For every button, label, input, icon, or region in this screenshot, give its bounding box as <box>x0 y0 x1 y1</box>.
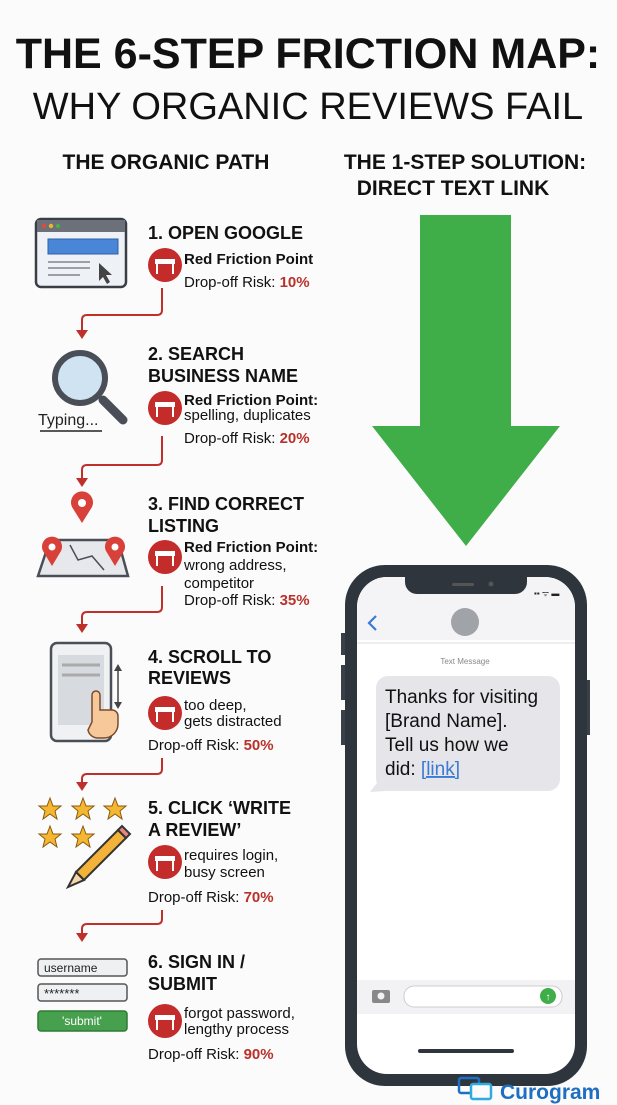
message bubble <box>370 676 560 792</box>
step 3: LISTING <box>148 516 219 536</box>
badge: friction <box>148 696 182 730</box>
icon: map pins <box>38 491 128 576</box>
icon: stars and pencil <box>39 798 130 887</box>
step 4: 4. SCROLL TO <box>148 647 271 667</box>
arrow: connector 4-5 <box>76 758 162 791</box>
step 4: Drop-off Risk: 50% <box>148 737 274 754</box>
badge: friction <box>148 540 182 574</box>
title <box>16 30 600 128</box>
step 1: 1. OPEN GOOGLE <box>148 223 303 243</box>
arrow: connector 3-4 <box>76 586 162 633</box>
step 5: A REVIEW’ <box>148 820 241 840</box>
icon: login form <box>38 959 127 1031</box>
message bubble: did: [link] <box>385 759 460 780</box>
icon: tablet scroll <box>51 643 122 741</box>
arrow: connector 2-3 <box>76 436 162 487</box>
icon: magnifier: Typing... <box>38 412 98 429</box>
arrow: connector 1-2 <box>76 288 162 339</box>
icon: login form: username <box>44 961 98 975</box>
step 3: 3. FIND CORRECT <box>148 494 304 514</box>
step 1: Red Friction Point <box>184 251 313 268</box>
step 2 <box>38 344 318 447</box>
badge: friction <box>148 248 182 282</box>
icon: magnifier <box>38 353 123 431</box>
badge: friction <box>148 391 182 425</box>
badge: friction <box>148 845 182 879</box>
icon: login form: ******* <box>44 986 79 1001</box>
step 4: gets distracted <box>184 713 282 730</box>
step 2: 2. SEARCH <box>148 344 244 364</box>
icon: login form: 'submit' <box>62 1014 102 1028</box>
step 5: busy screen <box>184 864 265 881</box>
step 5: requires login, <box>184 847 278 864</box>
message bubble: Tell us how we <box>385 735 509 756</box>
step 6: forgot password, <box>184 1005 295 1022</box>
badge: friction <box>148 1004 182 1038</box>
step 4 <box>51 643 282 754</box>
logo: Curogram: Curogram <box>500 1081 600 1104</box>
message bubble: [Brand Name]. <box>385 711 508 732</box>
title: THE 6-STEP FRICTION MAP: <box>16 30 600 78</box>
arrow: big green down <box>372 215 560 546</box>
step 3: Drop-off Risk: 35% <box>184 592 310 609</box>
arrow: connector 5-6 <box>76 910 162 942</box>
icon: browser <box>36 219 126 287</box>
step 4: too deep, <box>184 697 247 714</box>
phone: ↑ <box>546 992 550 1003</box>
step 2: spelling, duplicates <box>184 407 311 424</box>
step 2: Red Friction Point: <box>184 392 318 409</box>
step 1 <box>36 219 313 291</box>
step 6: lengthy process <box>184 1021 289 1038</box>
heading: 1-step solution <box>344 151 586 200</box>
heading: organic path: THE ORGANIC PATH <box>63 151 269 174</box>
step 6: SUBMIT <box>148 974 217 994</box>
step 5 <box>39 798 291 906</box>
phone <box>341 565 590 1086</box>
step 3: competitor <box>184 575 254 592</box>
step 2: Drop-off Risk: 20% <box>184 430 310 447</box>
step 6: Drop-off Risk: 90% <box>148 1046 274 1063</box>
heading: 1-step solution: THE 1-STEP SOLUTION: <box>344 151 586 174</box>
step 6: 6. SIGN IN / <box>148 952 245 972</box>
step 3: Red Friction Point: <box>184 539 318 556</box>
heading: 1-step solution: DIRECT TEXT LINK <box>357 177 549 200</box>
phone: Text Message <box>440 657 490 666</box>
step 5: 5. CLICK ‘WRITE <box>148 798 291 818</box>
step 3: wrong address, <box>183 557 287 574</box>
message bubble: Thanks for visiting <box>385 687 538 708</box>
step 6 <box>38 952 295 1063</box>
logo: Curogram <box>459 1078 600 1104</box>
step 4: REVIEWS <box>148 668 231 688</box>
step 1: Drop-off Risk: 10% <box>184 274 310 291</box>
step 2: BUSINESS NAME <box>148 366 298 386</box>
step 5: Drop-off Risk: 70% <box>148 889 274 906</box>
phone: ▪▪ ᯤ ▬ <box>534 589 559 598</box>
title: WHY ORGANIC REVIEWS FAIL <box>33 86 583 128</box>
step 3 <box>38 491 318 609</box>
